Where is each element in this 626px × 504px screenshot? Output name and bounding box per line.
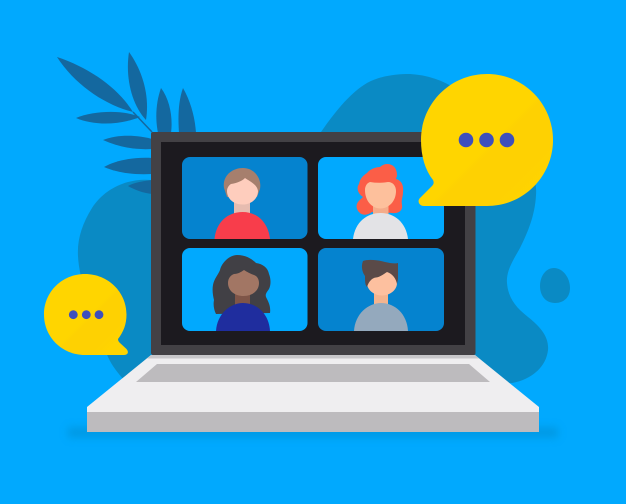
laptop shadow xyxy=(68,427,558,438)
video tile: woman with dark hair xyxy=(182,248,308,331)
typing dots xyxy=(69,310,103,319)
video tile: man with dark hair xyxy=(318,248,444,331)
video tile: woman with red hair xyxy=(318,157,444,239)
base front edge xyxy=(87,412,539,432)
background blob: right xyxy=(300,74,548,383)
laptop base xyxy=(87,355,539,432)
keyboard xyxy=(136,364,490,382)
background blob: left xyxy=(78,180,151,380)
screen panel xyxy=(161,142,465,345)
deck hinge strip xyxy=(147,355,479,358)
base top deck xyxy=(87,355,539,412)
speech bubble: large xyxy=(419,74,553,206)
speech bubble: small xyxy=(44,274,128,355)
plant leaves xyxy=(57,52,196,194)
background blob: small xyxy=(540,268,570,303)
laptop screen frame xyxy=(151,132,476,355)
video tile: man in red xyxy=(182,157,308,239)
typing dots xyxy=(459,133,514,147)
